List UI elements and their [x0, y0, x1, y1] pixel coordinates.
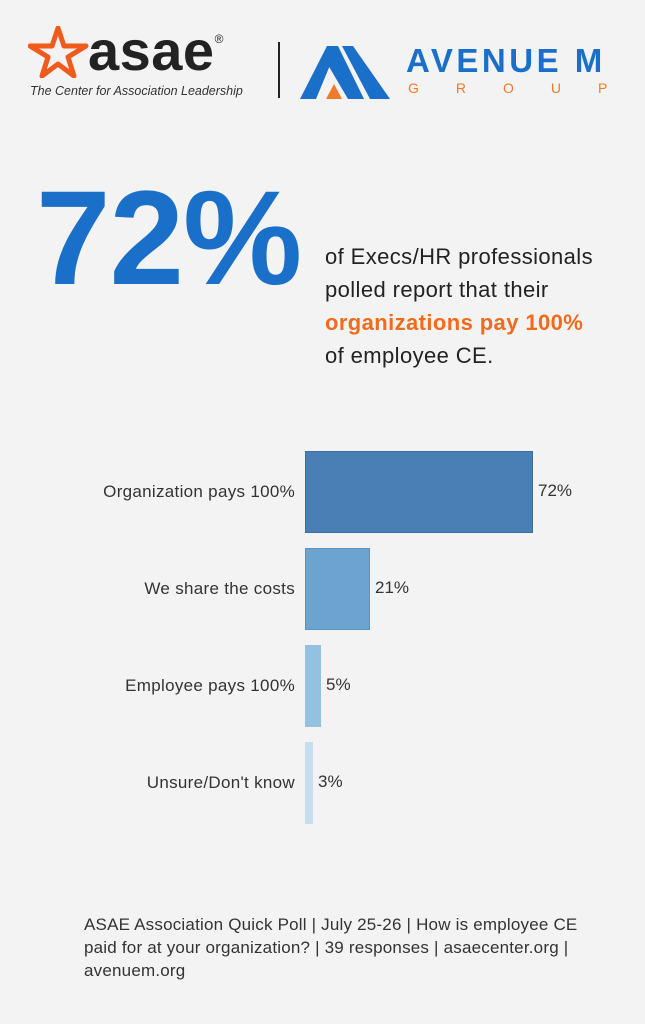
bar chart: 21% [375, 578, 409, 597]
bar chart: 5% [326, 675, 351, 694]
bars [305, 451, 533, 533]
text: GROUP: GROUP [408, 80, 644, 96]
logo: asae [28, 19, 243, 98]
bar chart: Unsure/Don't know [147, 773, 295, 792]
big stat: 72% [36, 164, 301, 313]
footer source: ASAE Association Quick Poll | July 25-26 | How is employee CE paid for at your organization? | 39 responses | asaecenter.org | avenuem.org [84, 915, 577, 980]
values: 72% [538, 481, 572, 500]
logo: Avenue M Group [300, 42, 644, 99]
icon: orange star [28, 26, 88, 78]
bar chart [103, 451, 572, 824]
bar chart: Employee pays 100% [125, 676, 295, 695]
divider [278, 42, 280, 98]
labels: Organization pays 100% [103, 482, 295, 501]
tagline: The Center for Association Leadership [30, 84, 243, 98]
text: asae wordmark: asae® [88, 19, 224, 82]
stat description: of Execs/HR professionals polled report that their organizations pay 100% of employee CE. [325, 244, 593, 368]
icon: mountains [300, 46, 390, 99]
bar chart: 3% [318, 772, 343, 791]
bar chart: We share the costs [144, 579, 295, 598]
text: AVENUE M: AVENUE M [406, 42, 606, 79]
